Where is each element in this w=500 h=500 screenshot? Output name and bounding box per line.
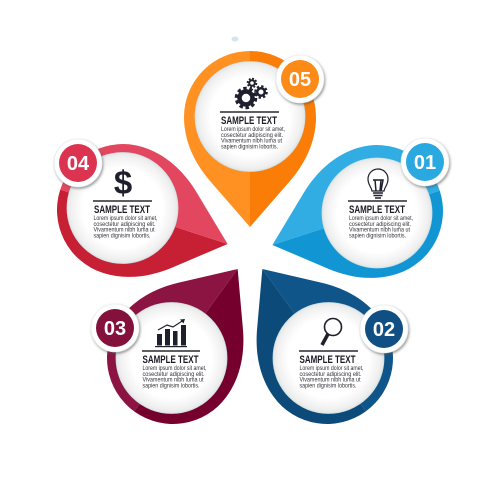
badge 03: [91, 304, 139, 352]
panel: 05 orange pin: [184, 51, 324, 227]
text block: Lorem ipsum dolor sit amet,: [94, 215, 158, 222]
pin shape blue: [252, 128, 460, 308]
text block: SAMPLE TEXT: [349, 204, 405, 216]
badge 03: 03: [104, 318, 126, 340]
inner circle: [195, 62, 305, 172]
badge 02: [360, 305, 408, 353]
text block: [299, 350, 364, 390]
text block: sapien dignisim lobortis.: [221, 144, 278, 150]
text block: [348, 200, 413, 240]
panel: 01 blue pin: [252, 128, 460, 308]
text block: sapien dignisim lobortis.: [94, 232, 151, 240]
text block: Lorem ipsum dolor sit amet,: [300, 365, 364, 372]
text block: [93, 200, 158, 240]
pin shape red: [40, 127, 248, 307]
text block: sapien dignisim lobortis.: [349, 232, 406, 240]
icon: magnifier: [322, 318, 342, 345]
text block: SAMPLE TEXT: [142, 354, 199, 366]
text block: Vivamentum nibh luma ut: [94, 226, 155, 234]
badge 05: [276, 55, 324, 103]
text block: [142, 350, 207, 390]
text block: cosectetur adipiscing elit.: [142, 371, 205, 378]
text block: sapien dignisim lobortis.: [142, 382, 200, 390]
badge 01: [401, 138, 449, 186]
text block: Lorem ipsum dolor sit amet,: [221, 126, 285, 133]
text block: cosectetur adipiscing elit.: [221, 132, 283, 139]
inner circle: [67, 152, 178, 264]
inner circle: [116, 302, 227, 414]
badge 02: 02: [373, 319, 395, 341]
inner circle: [273, 302, 384, 414]
pin shape maroon: [81, 230, 291, 450]
panel: 03 maroon pin: [81, 230, 291, 450]
pin shape orange: [184, 51, 316, 227]
text block: Lorem ipsum dolor sit amet,: [349, 215, 413, 222]
badge 05: 05: [289, 69, 311, 91]
text block: sapien dignisim lobortis.: [300, 382, 357, 390]
text block: cosectetur adipiscing elit.: [300, 371, 362, 378]
text block: cosectetur adipiscing elit.: [94, 221, 156, 228]
pin shape navy: [209, 230, 419, 450]
text block: SAMPLE TEXT: [221, 115, 277, 127]
inner circle: [322, 158, 432, 268]
icon: light bulb: [368, 169, 388, 198]
panel: 04 red pin: [40, 127, 248, 307]
badge 04: 04: [67, 153, 90, 175]
icon: bar chart with arrow: [155, 319, 187, 347]
icon: gears: [236, 79, 267, 108]
text block: Lorem ipsum dolor sit amet,: [142, 365, 207, 372]
watermark smudge: [232, 36, 238, 42]
text block: Vivamentum nibh luma ut: [142, 376, 204, 384]
text block: cosectetur adipiscing elit.: [349, 221, 411, 228]
icon: dollar sign: $: [114, 164, 132, 201]
text block: SAMPLE TEXT: [300, 354, 356, 366]
badge 01: 01: [414, 152, 436, 174]
panel: 02 navy pin: [209, 230, 419, 450]
text block: Vivamentum nibh luma ut: [349, 226, 410, 234]
text block: Vivamentum nibh luma ut: [300, 376, 361, 384]
text block: [220, 111, 285, 150]
badge 04: [54, 139, 102, 187]
text block: SAMPLE TEXT: [94, 204, 150, 216]
text block: Vivamentum nibh luma ut: [221, 138, 282, 144]
